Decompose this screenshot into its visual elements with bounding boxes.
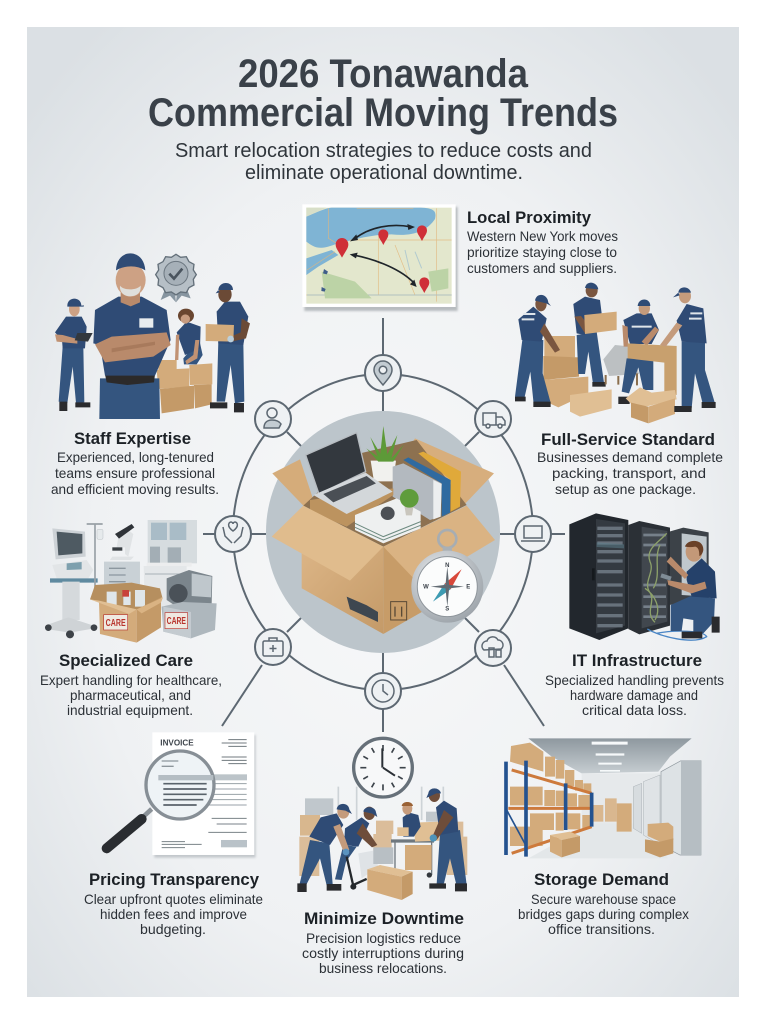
back flaps [272, 438, 494, 547]
panel: minimize downtime [297, 738, 467, 976]
blue and orange racking [506, 761, 592, 857]
illustration: server racks and technician [569, 513, 720, 640]
panel: full-service standard [515, 283, 723, 497]
body text [537, 449, 723, 497]
care box: CARE [106, 618, 126, 629]
heading: Specialized Care [59, 651, 193, 670]
title: Commercial Moving Trends [148, 91, 618, 135]
stacked boxes right [645, 823, 673, 857]
body text: teams ensure professional [55, 465, 215, 481]
shelving boxes [510, 743, 632, 846]
map arrows [353, 225, 414, 283]
stack of boxes [157, 360, 212, 413]
heading: Full-Service Standard [541, 430, 715, 449]
body text: bridges gaps during complex [518, 906, 689, 922]
patient monitor cart [45, 524, 103, 638]
icon nodes around the ring [215, 355, 551, 709]
floor box [550, 832, 580, 857]
body text: customers and suppliers. [467, 260, 617, 276]
heading: Minimize Downtime [304, 909, 464, 928]
illustration: invoice and magnifier [107, 732, 256, 858]
body text [467, 228, 618, 276]
panel: storage demand [506, 738, 701, 937]
body text: Clear upfront quotes eliminate [84, 891, 263, 907]
body text: Businesses demand complete [537, 449, 723, 465]
body text: prioritize staying close to [467, 244, 617, 260]
body text: Experienced, long-tenured [57, 449, 214, 465]
body text [545, 672, 724, 718]
central grey disk [266, 411, 500, 653]
compass [411, 530, 483, 623]
woman packing [175, 309, 203, 364]
body text: Expert handling for healthcare, [40, 672, 222, 688]
storage lockers [633, 761, 701, 855]
panel: pricing transparency [84, 732, 263, 937]
microscope on drawer cabinet [104, 524, 140, 593]
body text: hidden fees and improve [100, 906, 247, 922]
body text [51, 449, 219, 497]
compass: W [423, 584, 429, 590]
body text: industrial equipment. [67, 702, 193, 718]
binders [393, 452, 461, 520]
icon: staff badge [255, 401, 291, 437]
mover 3 with desk [618, 299, 677, 404]
boxes left [542, 336, 612, 417]
backdrop of room and stock [299, 787, 467, 876]
heading: Pricing Transparency [89, 870, 260, 889]
plant [366, 426, 404, 481]
body text: Precision logistics reduce [306, 930, 461, 946]
illustration: movers packing [515, 283, 716, 423]
industrial machine: CARE [167, 616, 186, 627]
compass: E [466, 584, 470, 590]
open box [626, 387, 677, 423]
body text: critical data loss. [582, 702, 687, 718]
panel: local proximity [302, 204, 618, 311]
body text: costly interruptions during [302, 945, 464, 961]
mover 2 with trolley [335, 807, 393, 890]
first rack [569, 513, 628, 640]
icon: location pin [365, 355, 401, 391]
right worker with box [206, 283, 250, 412]
technician [660, 541, 720, 638]
armchair [603, 345, 639, 385]
map pins [336, 225, 429, 293]
subtitle: eliminate operational downtime. [245, 162, 523, 184]
third rack [669, 528, 709, 605]
icon: clock [365, 673, 401, 709]
body text: and efficient moving results. [51, 481, 219, 497]
illustration: warehouse [506, 738, 701, 858]
body text [84, 891, 263, 937]
body text: budgeting. [140, 921, 206, 937]
box body and front flaps [272, 506, 495, 634]
heading: IT Infrastructure [572, 651, 702, 670]
subtitle [175, 140, 592, 184]
cart of boxes [392, 802, 439, 878]
body text [302, 930, 464, 976]
magnifier [107, 751, 214, 848]
title: 2026 Tonawanda [238, 52, 529, 96]
body text: pharmaceutical, and [70, 687, 191, 703]
care box [90, 583, 163, 643]
mover 3 standing [426, 788, 467, 891]
icon: wall clock [354, 738, 412, 797]
icon: cloud and devices [475, 630, 511, 666]
compass: N [445, 563, 449, 569]
body text: office transitions. [548, 921, 655, 937]
foreground box [367, 865, 413, 900]
compass: S [445, 607, 449, 613]
icon: hands and heart [215, 516, 251, 552]
icon: laptop [515, 516, 551, 552]
mover 4 [660, 287, 716, 412]
illustration: medical equipment [45, 520, 217, 643]
subtitle: Smart relocation strategies to reduce costs and [175, 140, 592, 162]
icon: first aid case [255, 629, 291, 665]
illustration: staff team [55, 253, 250, 419]
laptop [306, 433, 393, 527]
lab cabinet [144, 520, 197, 610]
mover 1 pushing [297, 804, 352, 892]
invoice sheet [152, 732, 256, 858]
heading: Local Proximity [467, 208, 592, 227]
icon: delivery truck [475, 401, 511, 437]
network cables [647, 629, 707, 640]
heading: Storage Demand [534, 870, 669, 889]
heading: Staff Expertise [74, 429, 191, 448]
body text [40, 672, 222, 718]
panel: it infrastructure [545, 513, 724, 718]
map card [302, 204, 458, 311]
second rack [628, 521, 670, 634]
ceiling, walls, floor [528, 738, 692, 858]
body text [518, 891, 689, 937]
panel: specialized care [40, 520, 222, 718]
body text: packing, transport, and [552, 465, 706, 481]
paper stack and mouse [355, 489, 421, 543]
mover 2 with box [573, 283, 617, 387]
body text: hardware damage and [570, 687, 698, 703]
body text: setup as one package. [555, 481, 696, 497]
body text: Western New York moves [467, 228, 618, 244]
mover 1 [515, 295, 560, 407]
title [148, 52, 618, 135]
body text: Specialized handling prevents [545, 672, 724, 688]
body text: business relocations. [319, 960, 447, 976]
rosette badge [156, 254, 196, 302]
left worker with clipboard [55, 299, 93, 411]
hub diagram: ring and spokes [203, 318, 565, 732]
invoice sheet: INVOICE [160, 739, 194, 748]
industrial machine [162, 570, 217, 638]
lead manager [93, 253, 171, 419]
body text: Secure warehouse space [531, 891, 676, 907]
central illustration: open box with office items and compass [272, 426, 495, 634]
panel: staff expertise [51, 253, 250, 497]
